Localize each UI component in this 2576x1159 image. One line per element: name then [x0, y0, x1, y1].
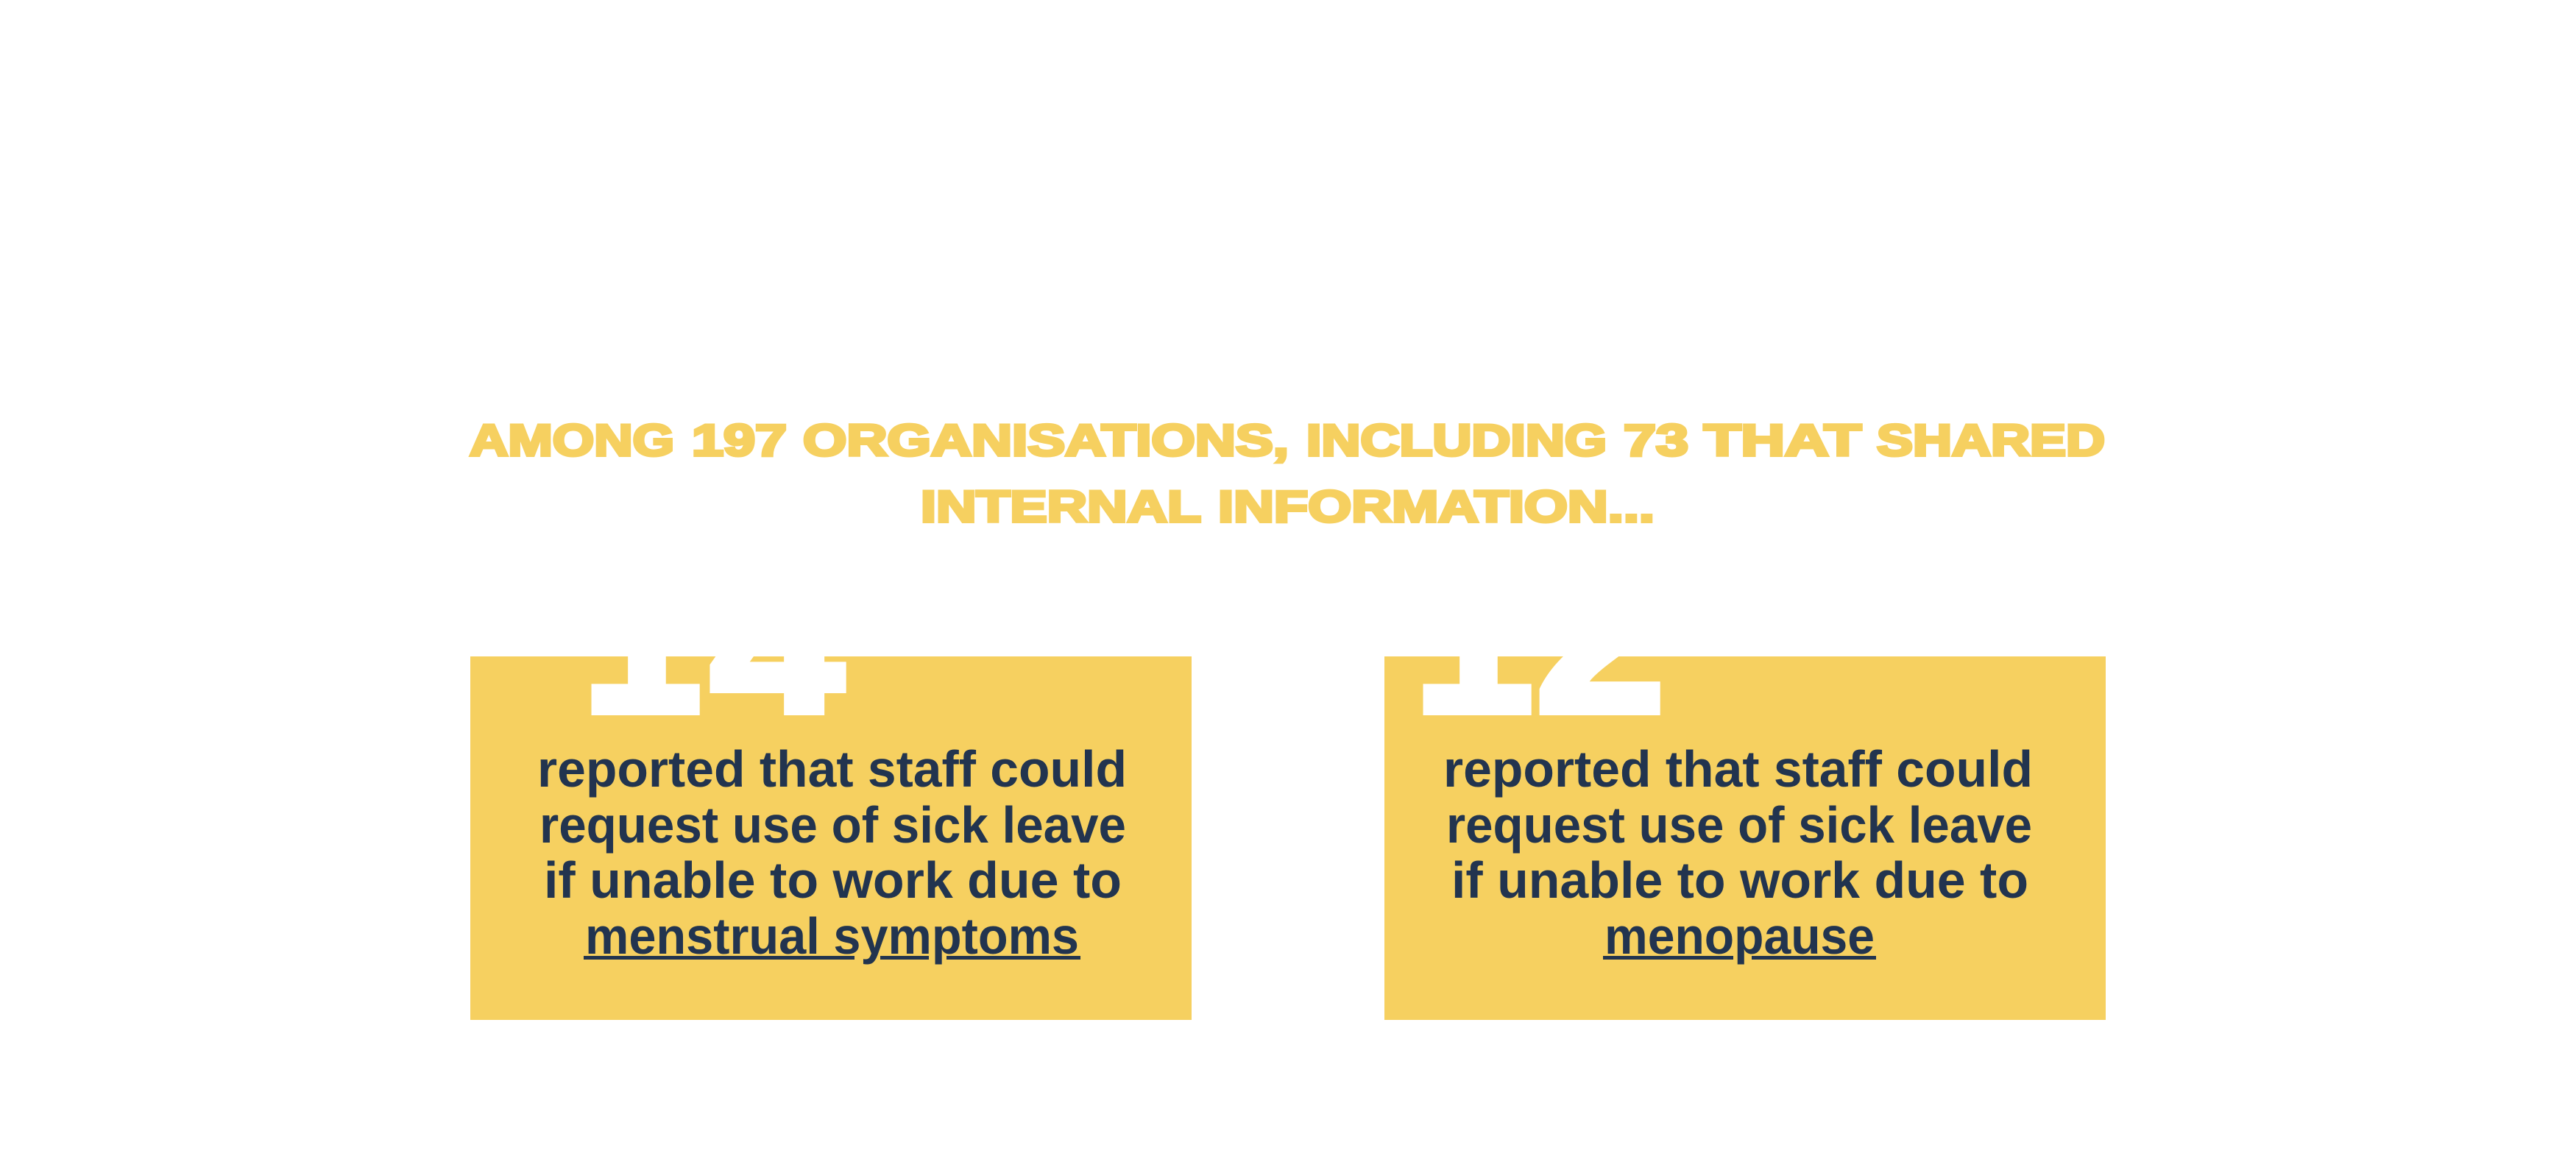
body text: request use of sick leave — [1446, 796, 2032, 854]
heading: 197 — [692, 416, 787, 465]
number 14 — [592, 656, 846, 715]
heading: THAT — [1704, 416, 1861, 465]
card background — [1384, 656, 2106, 1020]
number 12: 1 — [1414, 511, 1533, 758]
heading: INTERNAL — [921, 482, 1201, 531]
number 14: 4 — [711, 520, 844, 767]
number 12: 2 — [1536, 511, 1665, 758]
panel: menstrual symptoms — [470, 656, 1192, 1020]
body text: request use of sick leave — [539, 796, 1126, 854]
body text: if unable to work due to — [1451, 851, 2028, 909]
card background — [470, 656, 1192, 1020]
body text — [1443, 740, 2033, 965]
heading: 73 — [1624, 416, 1688, 465]
body text: menopause — [1604, 907, 1875, 965]
heading — [470, 416, 2105, 531]
number 12 — [1414, 511, 1665, 758]
heading: SHARED — [1877, 416, 2105, 465]
body text: reported that staff could — [537, 740, 1127, 798]
panel: menopause — [1384, 511, 2106, 1020]
body text: menstrual symptoms — [585, 907, 1079, 965]
body text — [537, 740, 1127, 965]
body text: if unable to work due to — [544, 851, 1122, 909]
body text: reported that staff could — [1443, 740, 2033, 798]
heading: INFORMATION... — [1218, 482, 1655, 531]
heading: INCLUDING — [1306, 416, 1607, 465]
heading: AMONG — [470, 416, 674, 465]
heading: ORGANISATIONS, — [803, 416, 1289, 465]
number 14: 1 — [582, 511, 701, 758]
